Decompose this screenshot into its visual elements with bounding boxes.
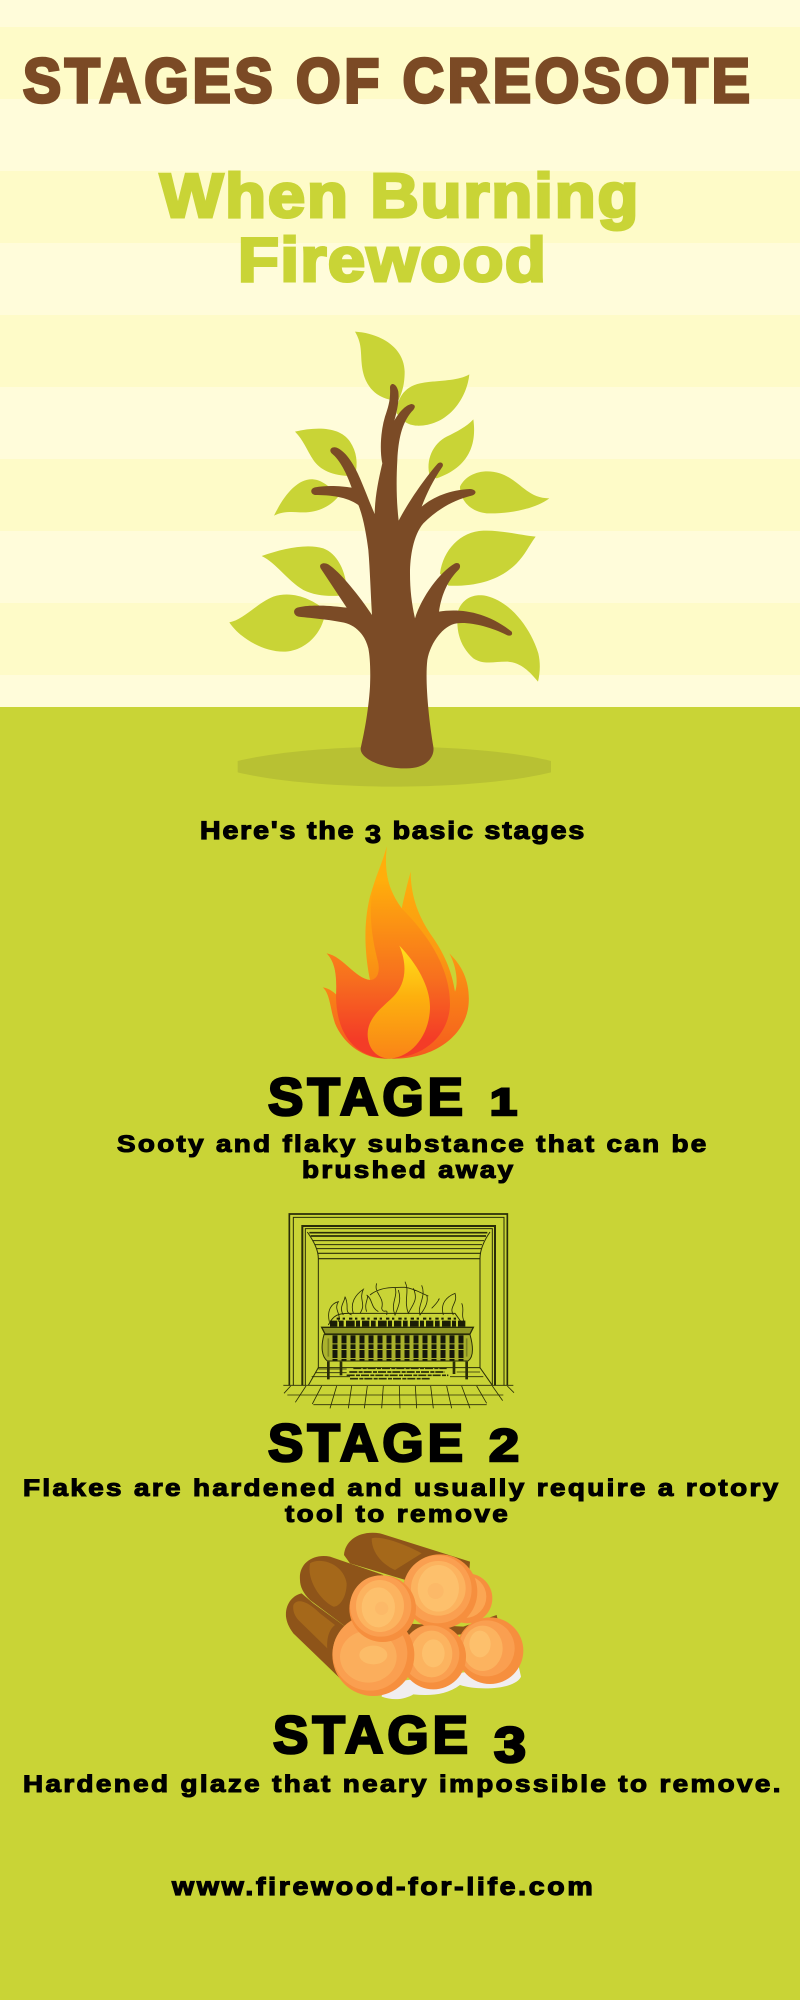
stage 2 heading: 2 [489,1420,519,1471]
icon: stacked firewood logs [286,1533,523,1699]
grate legs [328,1362,467,1379]
stage 2 description: Flakes are hardened and usually require a rotory [23,1474,779,1502]
leaves [229,332,549,682]
stage 1 description: Sooty and flaky substance that can be [117,1130,706,1158]
title: STAGES OF CREOSOTE [23,46,750,116]
stage 1 heading: 1 [490,1082,517,1124]
stage 3 description: Hardened glaze that neary impossible to remove. [23,1770,780,1798]
grate flames [329,1282,465,1323]
ash under grate [347,1368,448,1379]
stage 1 description: brushed away [302,1156,514,1184]
stage 1 description [117,1130,706,1184]
stage 2 heading: STAGE [268,1414,463,1473]
log ends [332,1554,523,1696]
fireplace frame [289,1214,507,1386]
stage 2 description: tool to remove [285,1500,508,1528]
ground shadow [238,747,551,787]
icon: flame [323,847,469,1059]
icon: tree with leaves [229,332,551,787]
subtitle: Firewood [238,225,546,294]
subtitle: When Burning [160,161,638,230]
stage 3 heading: STAGE [273,1706,468,1765]
white ground patch [382,1665,521,1699]
stage 3 heading: 3 [494,1717,526,1773]
grate basket [322,1313,473,1361]
intro text: Here's the [200,817,353,845]
stage 1 heading: STAGE [268,1068,463,1127]
hearth floor tiles [283,1385,514,1408]
stage 3 heading [273,1706,526,1773]
intro text: 3 [365,821,381,849]
icon: fireplace line drawing [283,1214,514,1408]
stage 2 description [23,1474,779,1528]
subtitle [160,161,638,294]
website url: www.firewood-for-life.com [171,1873,593,1901]
intro text: basic stages [383,817,584,845]
trunk and branches [294,384,512,768]
log bark [286,1533,500,1680]
